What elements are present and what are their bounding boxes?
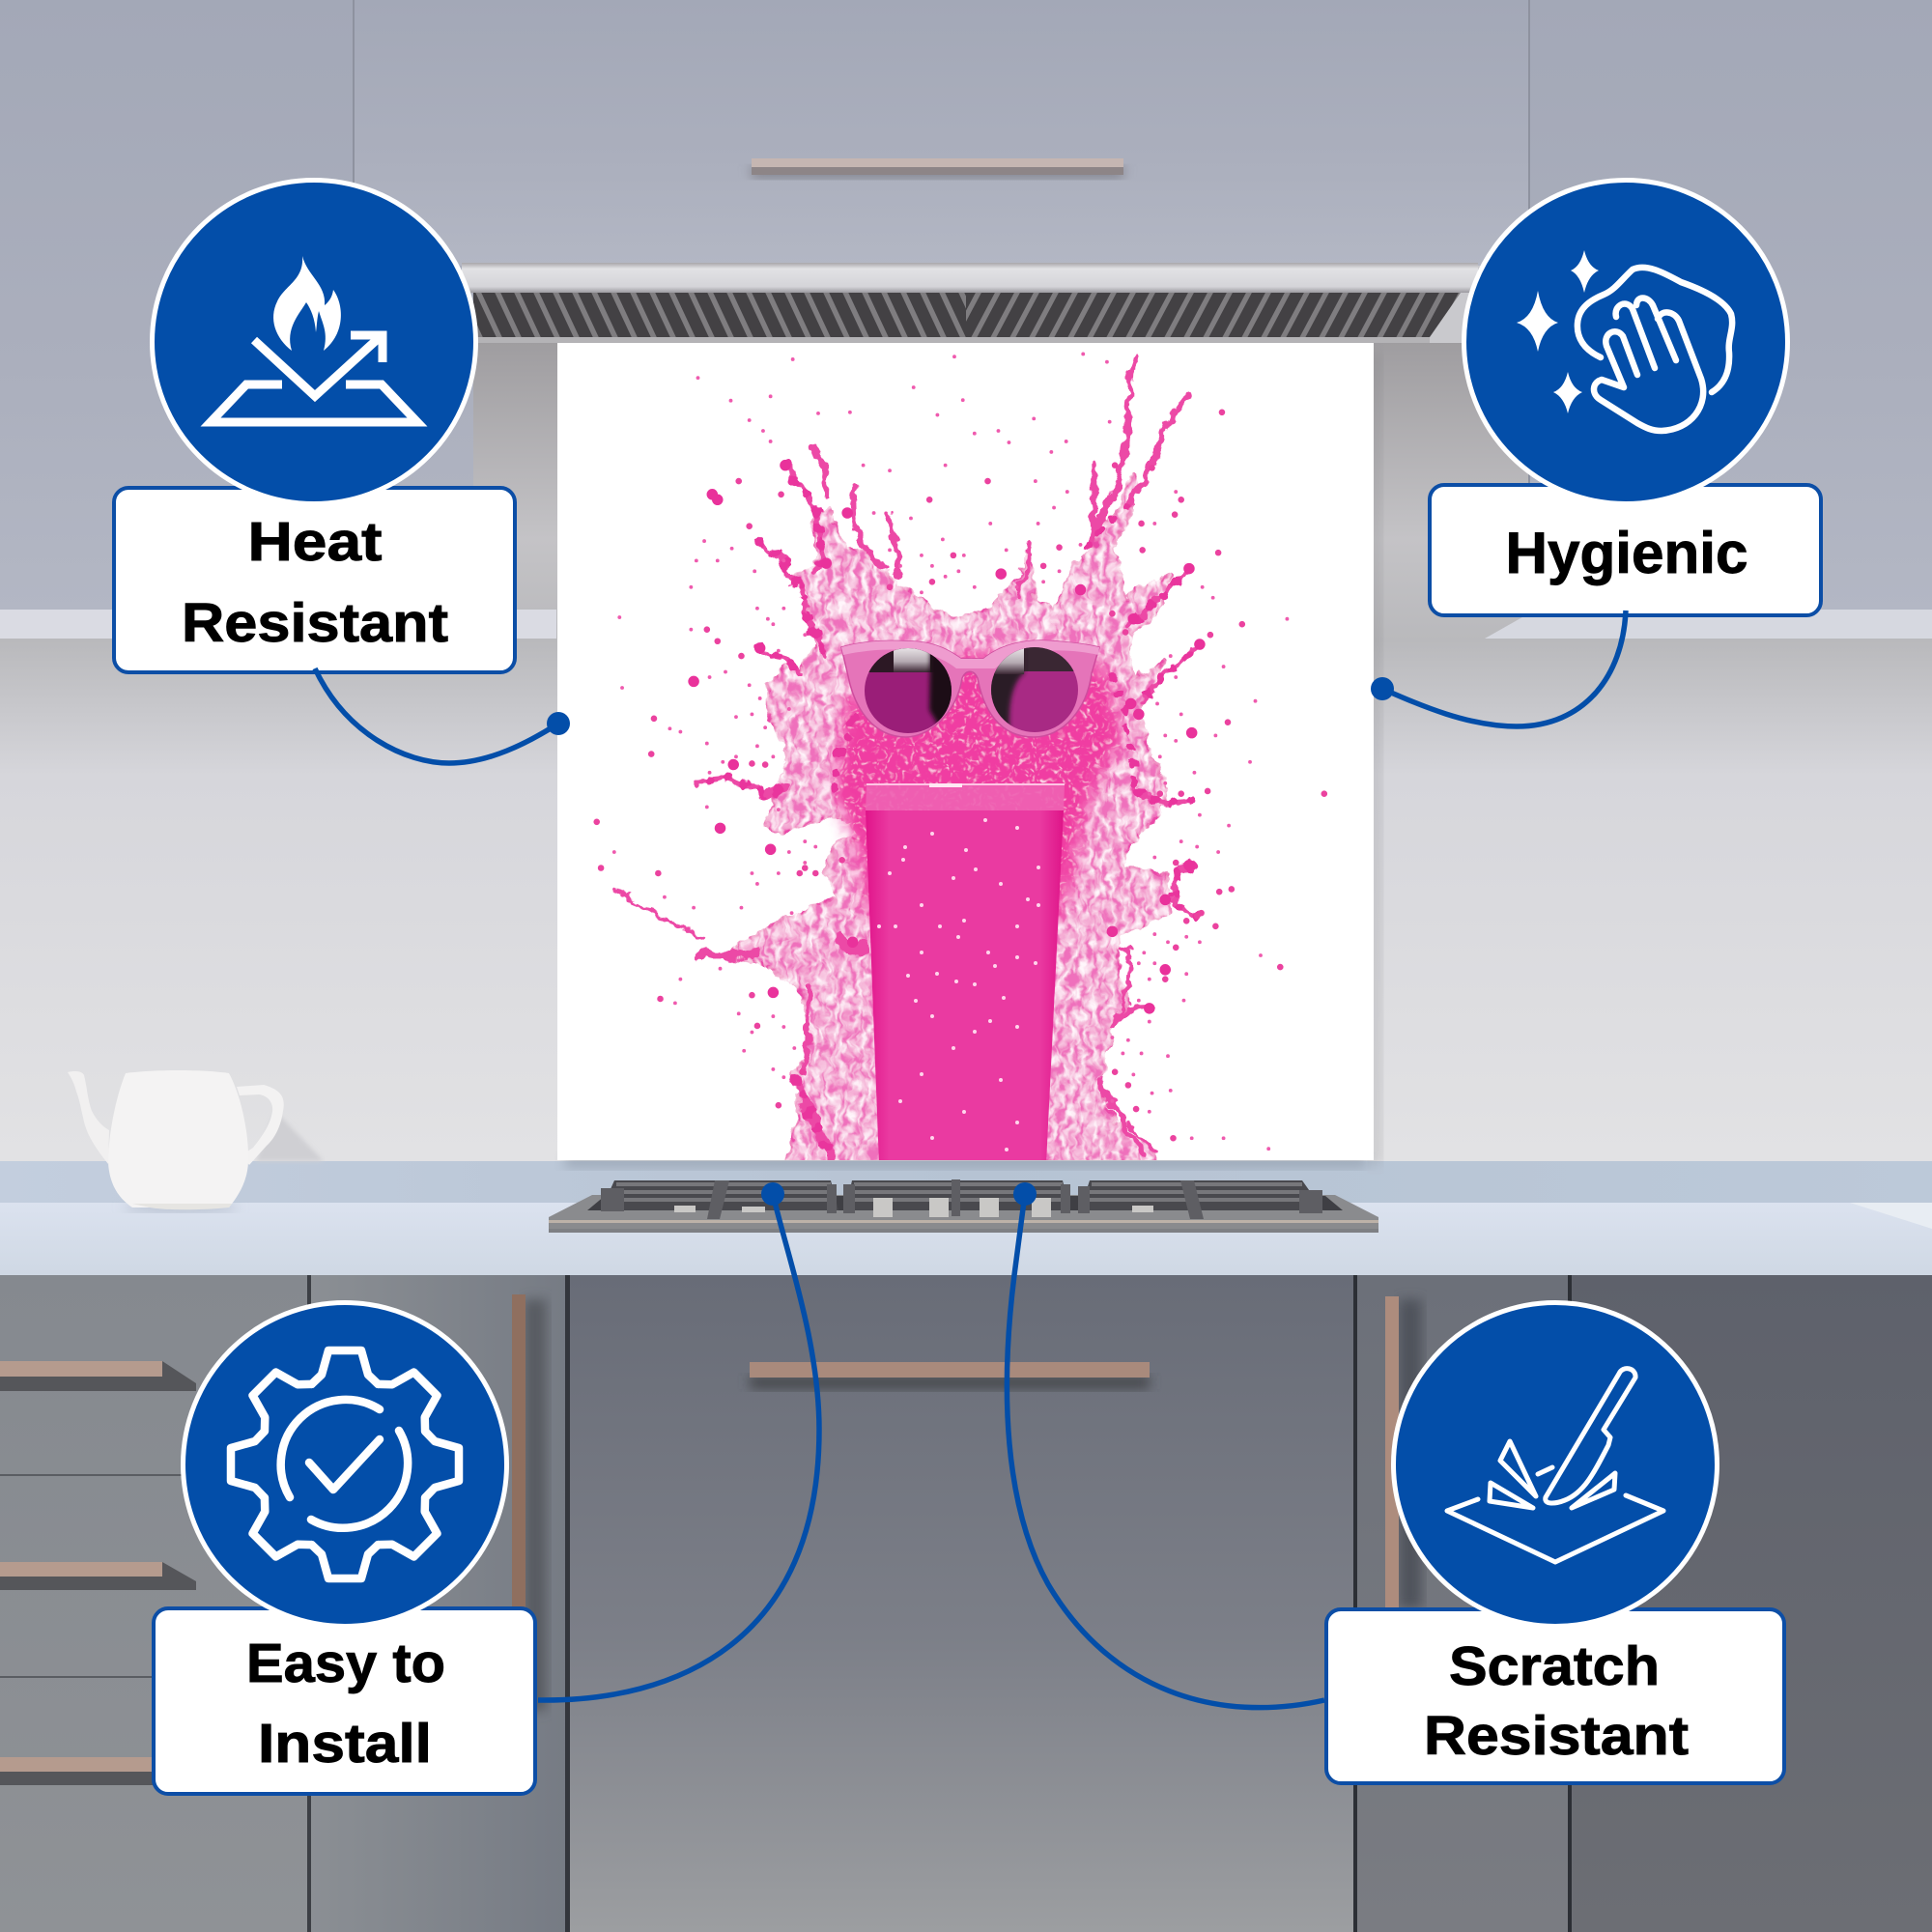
label box: Easy to [246, 1633, 445, 1694]
sunglasses [841, 638, 1099, 739]
label box: Hygienic [1505, 521, 1748, 585]
product panel: pink splash artwork [557, 343, 1381, 1168]
lower cabinets [0, 1275, 1932, 1932]
saturated core behind glasses [834, 651, 1122, 921]
splash droplets [597, 354, 1324, 1149]
worktop [0, 1161, 1932, 1275]
icon: flame over surface [153, 180, 475, 504]
connector [538, 1182, 819, 1700]
label box [114, 488, 515, 672]
connector [315, 668, 570, 763]
connector [1007, 1182, 1324, 1708]
pink glass [866, 810, 1064, 1164]
beads along the arms [710, 466, 1200, 1159]
label box: Install [258, 1713, 432, 1775]
cabinet handles [0, 1294, 1422, 1785]
feature: Scratch Resistant [1007, 1182, 1784, 1783]
cooktop [549, 1179, 1378, 1233]
label box: Resistant [1424, 1705, 1689, 1767]
feature: Hygienic [1371, 180, 1821, 726]
icon: hand wiping with sparkles [1464, 180, 1787, 504]
splash arms [617, 359, 1200, 1159]
glass rim [866, 783, 1065, 813]
icon: knife scratching surface [1393, 1302, 1718, 1627]
wall [0, 343, 1932, 1164]
feature: Heat Resistant [114, 180, 570, 763]
label box: Heat [247, 511, 383, 573]
icon: gear with check [184, 1302, 506, 1627]
splash body [725, 476, 1171, 1165]
label box: Resistant [182, 592, 448, 654]
label box [1326, 1609, 1784, 1783]
upper cabinets [0, 0, 1932, 639]
splash body and arms [617, 359, 1200, 1165]
label box: Scratch [1449, 1635, 1660, 1697]
feature: Easy to Install [154, 1182, 819, 1794]
left lens [865, 648, 952, 733]
label box [1430, 485, 1821, 615]
cabinet handle [752, 158, 1123, 178]
right lens [991, 647, 1078, 732]
teapot [68, 1070, 324, 1211]
glass highlights [879, 820, 1038, 1150]
label box [154, 1608, 535, 1794]
extractor hood [462, 263, 1478, 343]
connector [1371, 611, 1626, 726]
